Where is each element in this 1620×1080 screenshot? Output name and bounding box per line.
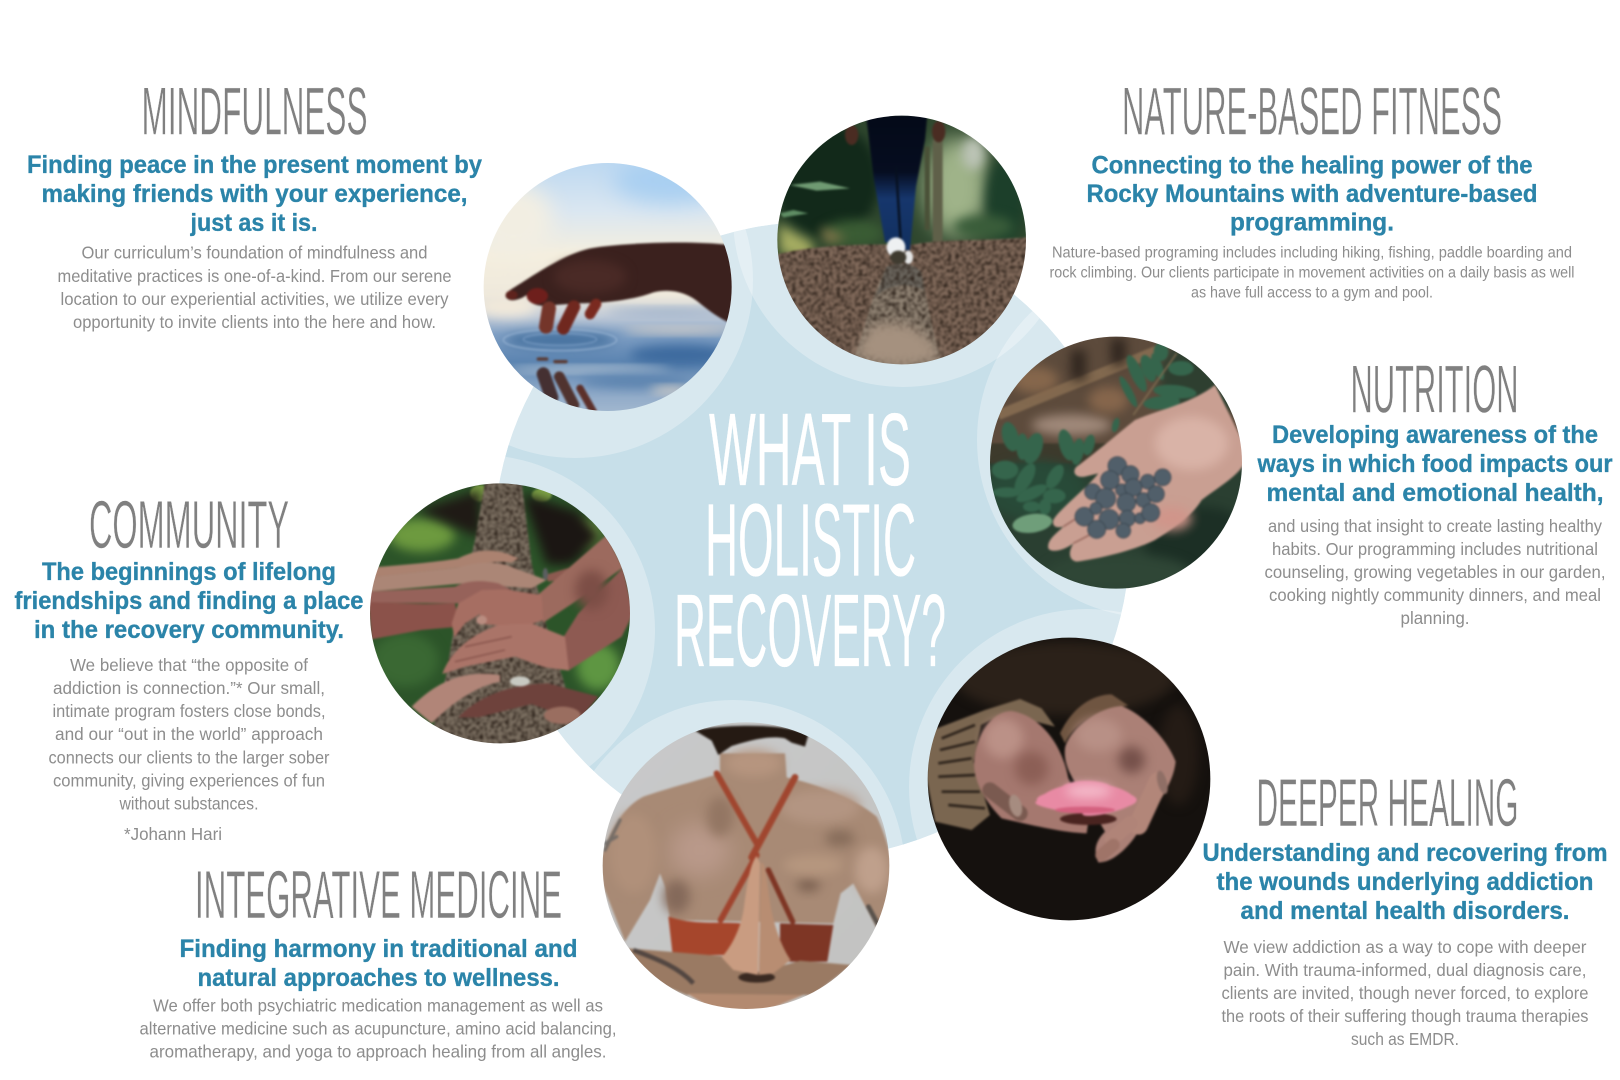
text: RECOVERY? xyxy=(674,573,946,688)
subheading: nature-based fitness xyxy=(1086,152,1538,236)
photo: feet walking on a log in the forest xyxy=(777,116,1026,364)
body text: community: connects our clients to the larger sober xyxy=(48,748,330,768)
body text: community: intimate program fosters close bonds, xyxy=(52,701,326,721)
subheading: deeper healing: and mental health disorders. xyxy=(1240,897,1570,925)
title: what is holistic recovery: HOLISTIC xyxy=(705,482,916,598)
subheading: mindfulness xyxy=(27,151,482,237)
photo: hands stacked on a tree trunk xyxy=(365,480,635,750)
body text: integrative medicine: We offer both psychiatric medication management as well as xyxy=(153,996,603,1016)
body text: nature-based fitness: as have full access to a gym and pool. xyxy=(1191,284,1433,302)
title: what is holistic recovery: WHAT IS xyxy=(709,392,911,507)
panel: integrative medicine: INTEGRATIVE MEDICINE xyxy=(195,857,562,933)
body text: integrative medicine: aromatherapy, and yoga to approach healing from all angles. xyxy=(150,1042,606,1062)
panel: mindfulness: MINDFULNESS xyxy=(142,74,368,150)
body text: mindfulness: location to our experiential activities, we utilize every xyxy=(60,289,449,309)
subheading: deeper healing: Understanding and recovering from xyxy=(1202,839,1608,867)
body text: mindfulness xyxy=(58,242,452,332)
panel: community: COMMUNITY xyxy=(89,487,289,563)
body text: nutrition xyxy=(1264,516,1606,628)
body text: community xyxy=(48,655,330,814)
body text: community: We believe that “the opposite of xyxy=(70,655,308,675)
subheading: integrative medicine xyxy=(180,935,578,992)
body text: integrative medicine: alternative medicine such as acupuncture, amino acid balancing, xyxy=(140,1018,616,1038)
panel: nature-based fitness xyxy=(1050,74,1574,302)
body text: nutrition: cooking nightly community dinners, and meal xyxy=(1269,585,1601,605)
photo: hand touching water xyxy=(484,163,732,411)
body text: deeper healing: We view addiction as a way to cope with deeper xyxy=(1224,937,1587,957)
subheading: deeper healing: the wounds underlying addiction xyxy=(1216,868,1594,896)
subheading: community xyxy=(14,558,364,644)
subheading: integrative medicine: Finding harmony in traditional and xyxy=(180,935,578,963)
body text: nature-based fitness: Nature-based programing includes including hiking, fishing, paddle boarding and xyxy=(1052,244,1572,262)
body text: deeper healing: such as EMDR. xyxy=(1351,1029,1459,1049)
subheading: nature-based fitness: Connecting to the healing power of the xyxy=(1092,152,1533,180)
body text: integrative medicine xyxy=(140,996,616,1062)
body text: nutrition: planning. xyxy=(1400,608,1470,628)
body text: mindfulness: Our curriculum’s foundation of mindfulness and xyxy=(82,242,428,262)
panel: mindfulness xyxy=(27,74,482,332)
body text: mindfulness: meditative practices is one-of-a-kind. From our serene xyxy=(58,266,452,286)
subheading: deeper healing xyxy=(1202,839,1608,925)
body text: community: addiction is connection.”* Our small, xyxy=(53,678,325,698)
subheading: nature-based fitness: Rocky Mountains with adventure-based xyxy=(1086,180,1538,208)
arms from the left xyxy=(368,551,547,639)
subheading: mindfulness: just as it is. xyxy=(190,209,318,237)
subheading: mindfulness: making friends with your experience, xyxy=(42,180,468,208)
subheading: mindfulness: Finding peace in the present moment by xyxy=(27,151,482,179)
subheading: community: friendships and finding a place xyxy=(14,587,364,615)
subheading: nutrition xyxy=(1257,421,1613,507)
subheading: integrative medicine: natural approaches to wellness. xyxy=(198,964,560,992)
panel: deeper healing xyxy=(1202,765,1608,1049)
photo: hand holding blueberries xyxy=(990,336,1242,589)
body text: community: and our “out in the world” approach xyxy=(55,724,323,744)
body text: nature-based fitness: rock climbing. Our clients participate in movement activities on a daily basis as well xyxy=(1050,264,1574,282)
panel: community xyxy=(14,487,364,844)
body text: nutrition: habits. Our programming includes nutritional xyxy=(1272,539,1598,559)
body text: mindfulness: opportunity to invite clients into the here and how. xyxy=(73,312,436,332)
body text: community: community, giving experiences of fun xyxy=(53,770,325,790)
photo: back with hands in reverse prayer xyxy=(600,720,892,1013)
subheading: nature-based fitness: programming. xyxy=(1230,208,1394,236)
panel: integrative medicine xyxy=(140,857,616,1062)
body text: nature-based fitness xyxy=(1050,244,1574,302)
body text: nutrition: and using that insight to create lasting healthy xyxy=(1268,516,1602,536)
panel: nutrition xyxy=(1257,352,1613,628)
subheading: community: in the recovery community. xyxy=(34,616,344,644)
body text: deeper healing: clients are invited, though never forced, to explore xyxy=(1222,983,1588,1003)
body text: deeper healing: the roots of their suffering though trauma therapies xyxy=(1222,1006,1589,1026)
photo: cupped hands with pink flower xyxy=(925,635,1215,925)
citation: Johann Hari: *Johann Hari xyxy=(124,824,222,844)
subheading: community: The beginnings of lifelong xyxy=(42,558,336,586)
central blue circle with halos xyxy=(499,224,1126,848)
body text: deeper healing xyxy=(1222,937,1589,1049)
body text: deeper healing: pain. With trauma-informed, dual diagnosis care, xyxy=(1224,960,1586,980)
subheading: nutrition: mental and emotional health, xyxy=(1266,479,1604,507)
body text: nutrition: counseling, growing vegetables in our garden, xyxy=(1264,562,1606,582)
subheading: nutrition: Developing awareness of the xyxy=(1272,421,1598,449)
title: what is holistic recovery xyxy=(674,392,946,688)
body text: community: without substances. xyxy=(119,794,258,814)
